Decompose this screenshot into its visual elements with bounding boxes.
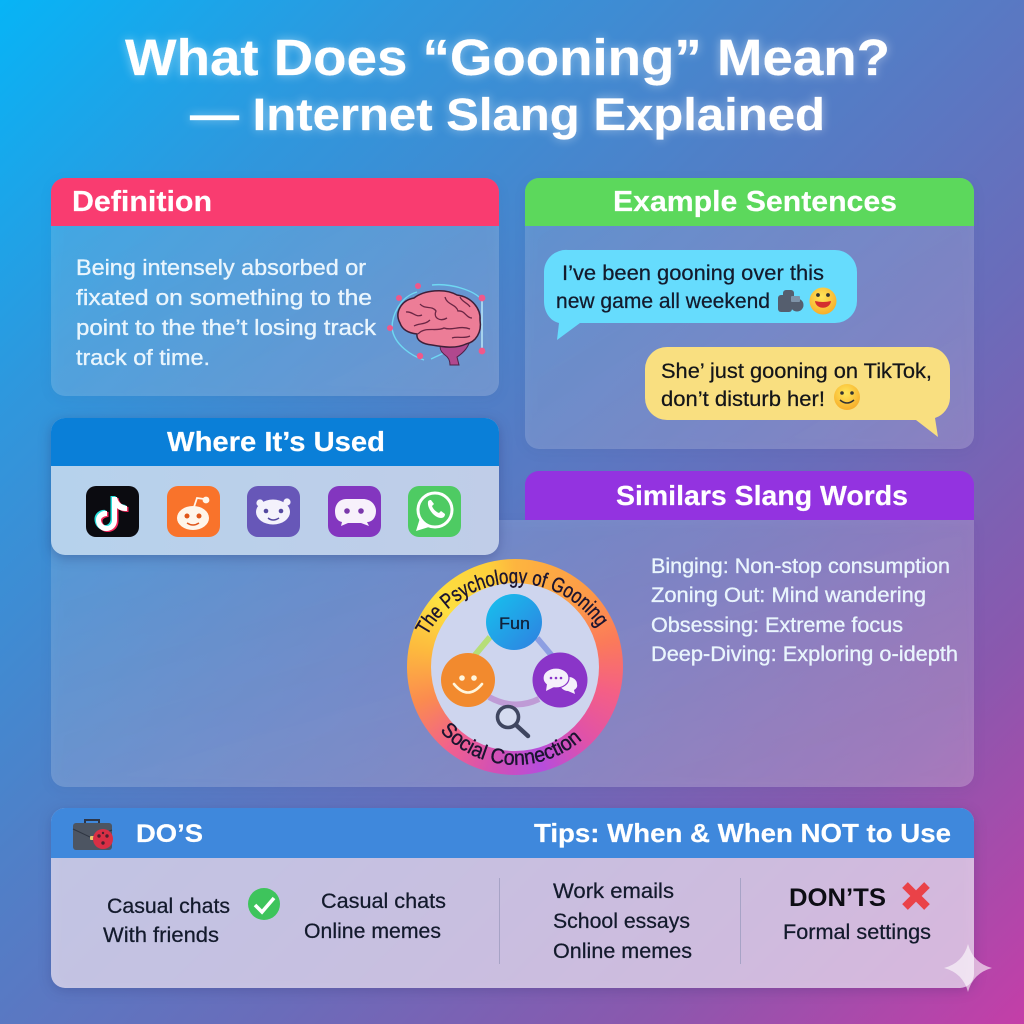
where header <box>51 418 499 466</box>
definition text: fixated on something to the <box>76 285 372 310</box>
speech bubble: blue: I’ve been gooning over this <box>562 262 824 285</box>
icon: whatsapp <box>408 486 461 537</box>
definition text: point to the the’t losing track <box>76 315 377 340</box>
connector arcs <box>475 637 553 705</box>
definition text <box>76 255 377 370</box>
icon: smiling emoji <box>834 384 860 410</box>
node: chat <box>532 652 588 708</box>
do's column two: Casual chats <box>321 890 446 913</box>
title: — Internet Slang Explained <box>190 89 825 140</box>
panel: tips <box>51 808 974 988</box>
speech bubble: yellow: She’ just gooning on TikTok, <box>661 360 932 383</box>
node: smile <box>441 653 495 707</box>
speech bubble: blue: new game all weekend <box>556 290 770 313</box>
ring caption: the psychology of gooning: The Psychology of Gooning <box>414 570 607 632</box>
icon: tiktok <box>86 486 139 537</box>
icon: magnifier <box>498 706 528 736</box>
don'ts heading <box>789 884 927 912</box>
similar slang header <box>525 471 974 520</box>
don't list: Work emails <box>553 880 674 903</box>
tips header <box>51 808 974 858</box>
do's column two <box>304 890 446 943</box>
node: fun: Fun <box>499 614 530 633</box>
icon: chat app <box>328 486 381 537</box>
slang list: Deep-Diving: Exploring o-idepth <box>651 643 958 666</box>
don't list: Online memes <box>553 940 692 963</box>
do's column one <box>103 895 230 947</box>
where header: Where It’s Used <box>167 426 385 457</box>
speech bubble: yellow: don’t disturb her! <box>661 388 825 411</box>
tips header: DO’S <box>136 820 203 848</box>
don'ts text: Formal settings <box>783 921 931 944</box>
icon: grinning emoji <box>810 288 836 314</box>
panel: example sentences <box>525 178 974 449</box>
slang list: Zoning Out: Mind wandering <box>651 584 926 607</box>
do's column one: Casual chats <box>107 895 230 918</box>
ring caption: social connection: Social Connection <box>442 723 582 766</box>
icon: check <box>248 888 280 920</box>
icon: brain <box>387 283 485 365</box>
definition header: Definition <box>72 186 212 218</box>
icon: red cross <box>905 885 927 907</box>
tips header: Tips: When & When NOT to Use <box>534 818 951 848</box>
icon: briefcase <box>73 820 113 850</box>
definition text: track of time. <box>76 345 210 370</box>
icon: gloves <box>778 290 804 312</box>
slang list: Binging: Non-stop consumption <box>651 555 950 578</box>
do's column one: With friends <box>103 924 219 947</box>
slang list <box>651 555 958 666</box>
gradient ring <box>407 559 623 775</box>
don't list: School essays <box>553 910 690 933</box>
node: fun <box>486 594 542 650</box>
panel: definition <box>51 178 499 396</box>
icon: purple robot <box>247 486 300 537</box>
icon: reddit <box>167 486 220 537</box>
panel: where it's used <box>51 418 499 555</box>
speech bubble: blue <box>544 250 857 340</box>
title: What Does “Gooning” Mean? <box>125 29 890 86</box>
example header: Example Sentences <box>613 186 897 218</box>
slang list: Obsessing: Extreme focus <box>651 614 903 637</box>
example header <box>525 178 974 226</box>
don'ts heading: DON’TS <box>789 884 886 912</box>
panel: similar slang words <box>51 471 974 787</box>
similar slang header: Similars Slang Words <box>616 480 908 511</box>
speech bubble: yellow <box>645 347 950 437</box>
don't list <box>553 880 692 963</box>
title <box>125 29 890 140</box>
definition header <box>51 178 499 226</box>
do's column two: Online memes <box>304 920 441 943</box>
icon: sparkle <box>944 944 992 992</box>
chart: psychology circle <box>407 559 623 775</box>
definition text: Being intensely absorbed or <box>76 255 366 280</box>
inner disc <box>431 583 599 751</box>
